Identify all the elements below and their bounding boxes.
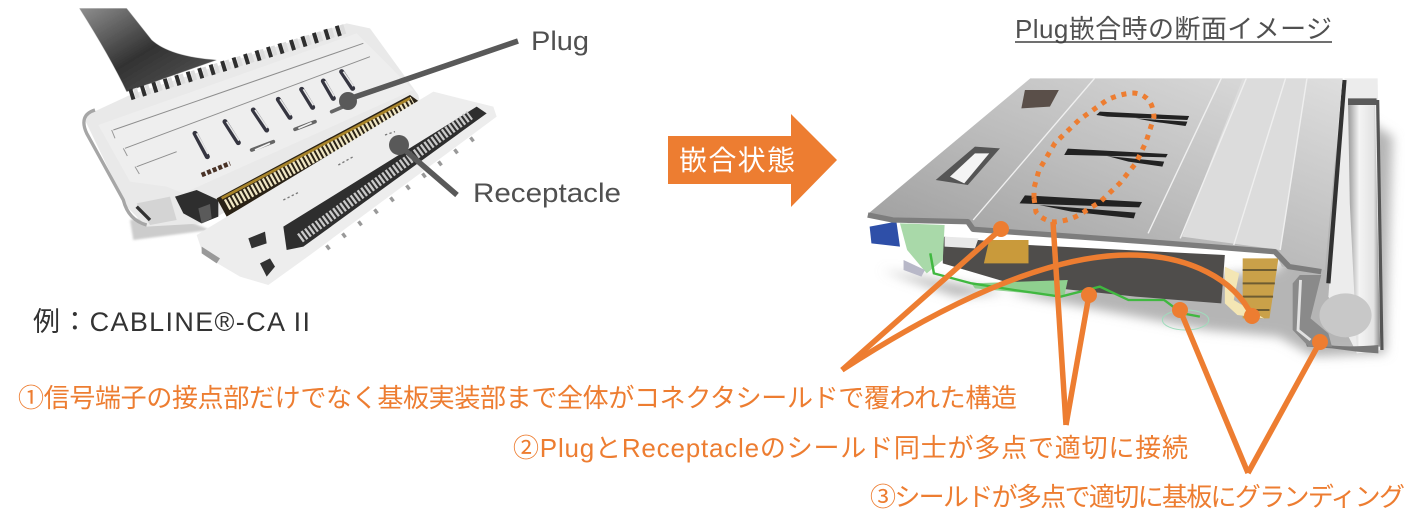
receptacle body — [197, 92, 497, 285]
label: Receptacle: Receptacle — [473, 178, 621, 208]
rod assembly — [1303, 78, 1382, 353]
label: Plug: Plug — [531, 26, 589, 56]
cross-section interior — [870, 222, 1332, 347]
shield top — [868, 78, 1343, 270]
photo: CABLINE-CA II plug and receptacle connector — [79, 8, 497, 285]
text: point 1: ①信号端子の接点部だけでなく基板実装部まで全体がコネクタシールドで覆われた構造 — [18, 383, 1017, 413]
shield slots — [936, 90, 1189, 218]
title: cross-section image: Plug嵌合時の断面イメージ — [1015, 14, 1332, 44]
photo: mated connector cross-section — [868, 78, 1393, 357]
caption: example product: 例：CABLINE®-CA II — [33, 307, 310, 337]
arrow: mated state — [668, 114, 837, 207]
leader line: Plug — [339, 41, 518, 110]
text: point 2: ②PlugとReceptacleのシールド同士が多点で適切に接続 — [513, 433, 1188, 463]
callout dot: point 2 — [1081, 287, 1097, 303]
cable — [79, 8, 217, 92]
plug shell — [83, 23, 420, 240]
plug black nose — [175, 190, 218, 223]
drop shadow — [882, 110, 1393, 357]
plug gold contacts — [217, 95, 422, 217]
callout lines: point 3 — [1180, 310, 1320, 473]
callout lines: point 2 — [1053, 222, 1089, 425]
leader line: Receptacle — [389, 135, 457, 195]
arrow: mated state: 嵌合状態 — [679, 145, 795, 176]
callout dots: point 3 — [1172, 302, 1328, 350]
text: point 3: ③シールドが多点で適切に基板にグランディング — [870, 482, 1405, 512]
dotted ellipse: shield contact area — [1034, 93, 1154, 222]
callout lines: point 1 — [842, 229, 1252, 370]
callout dots: point 1 — [993, 221, 1260, 324]
